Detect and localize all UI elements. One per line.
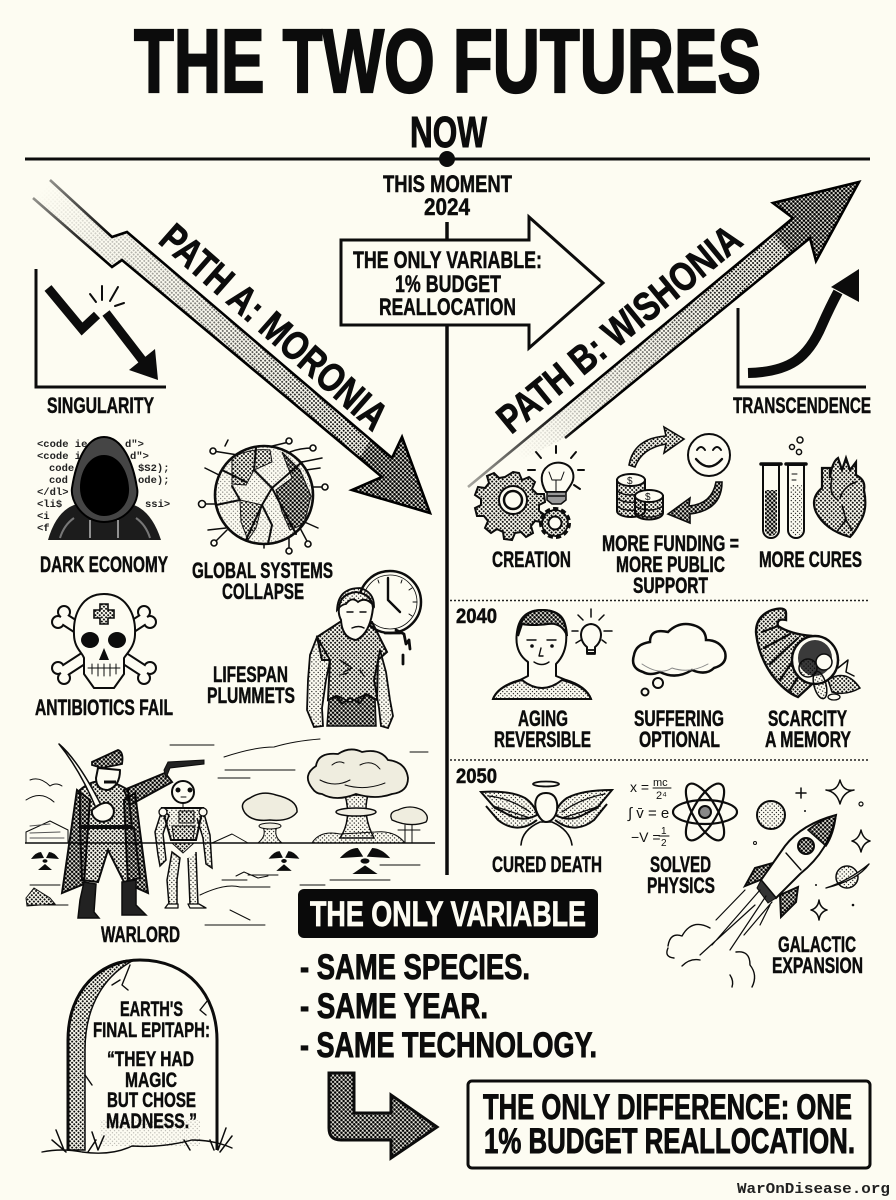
icon: hooded hacker with code: <i (37, 511, 50, 523)
icon: withering man and melting clock (307, 571, 421, 728)
chart: transcendence curve (738, 269, 866, 387)
tombstone: earth's final epitaph: EARTH'S (120, 998, 183, 1021)
label: lifespan plummets: PLUMMETS (207, 683, 295, 708)
icon: funding and public support cycle: $ (645, 492, 651, 503)
label: galactic expansion: GALACTIC (778, 932, 856, 957)
label: dark economy: DARK ECONOMY (40, 552, 168, 577)
icon: hooded hacker with code: ssi> (145, 499, 170, 511)
list: same species, year, technology: - SAME SPECIES. (300, 948, 530, 987)
label: antibiotics fail: ANTIBIOTICS FAIL (35, 695, 173, 720)
icon: equations and atom: −V = (631, 829, 661, 845)
arrow: path A descending (33, 180, 430, 513)
label: lifespan plummets: LIFESPAN (213, 662, 288, 687)
label: path B Wishonia: PATH B: WISHONIA (489, 217, 750, 442)
label: more funding more public support: MORE FUNDING = (602, 531, 739, 556)
divider and year: 2050: 2050 (456, 765, 497, 788)
label: scarcity a memory (765, 706, 851, 752)
icon: skull and crossbones (52, 594, 156, 688)
icon: funding and public support cycle: $ (627, 476, 633, 487)
callout arrow: the only variable (341, 217, 603, 348)
source credit: WarOnDisease.org (737, 1181, 890, 1198)
icon: hooded hacker with code: <code in (37, 451, 87, 463)
label: suffering optional: OPTIONAL (639, 727, 720, 752)
list: same species, year, technology (300, 948, 597, 1065)
heading: the only variable (298, 889, 598, 938)
icon: hooded hacker with code: d"> (130, 451, 149, 463)
callout arrow: the only variable: REALLOCATION (379, 294, 516, 321)
label: suffering optional (634, 706, 724, 752)
icon: equations and atom: 2 (661, 838, 667, 849)
label: creation: CREATION (492, 547, 571, 572)
now label: NOW (410, 108, 487, 157)
label: singularity: SINGULARITY (47, 393, 154, 418)
label: suffering optional: SUFFERING (634, 706, 724, 731)
icon: equations and atom: mc (653, 777, 668, 789)
mushroom clouds (242, 749, 427, 843)
heading: the only variable: THE ONLY VARIABLE (310, 895, 586, 934)
list: same species, year, technology: - SAME TECHNOLOGY. (300, 1026, 597, 1065)
callout arrow: the only variable: THE ONLY VARIABLE: (353, 247, 542, 274)
horizon and ground (25, 739, 435, 925)
label: aging reversible: REVERSIBLE (494, 727, 591, 752)
label: path A Moronia: PATH A: MORONIA (151, 216, 396, 439)
illustration: warlord and robot in nuclear wasteland (25, 739, 435, 925)
icon: hooded hacker with code: <f (37, 523, 50, 535)
central vertical divider (445, 222, 449, 875)
icon: test tubes and heart (761, 437, 865, 538)
arrow: path B ascending (468, 182, 859, 487)
icon: thought cloud (633, 624, 726, 696)
label: solved physics: PHYSICS (647, 873, 715, 898)
label: solved physics (647, 852, 715, 898)
label: cured death: CURED DEATH (492, 852, 602, 877)
icon: hooded hacker with code: <li$ (37, 499, 62, 511)
chart: singularity broken line (36, 269, 166, 387)
label: solved physics: SOLVED (650, 852, 711, 877)
tombstone: earth's final epitaph: MADNESS.” (106, 1110, 197, 1133)
icon: equations and atom (627, 777, 737, 849)
this moment 2024: THIS MOMENT (383, 171, 512, 198)
label: warlord: WARLORD (101, 922, 180, 947)
radiation symbols (31, 848, 390, 874)
panel: Moronia outcomes (25, 269, 435, 947)
label: aging reversible: AGING (518, 706, 568, 731)
label: lifespan plummets (207, 662, 295, 708)
icon: hooded hacker with code: d"> (125, 439, 144, 451)
callout: the only difference (468, 1081, 870, 1168)
icon: hooded hacker with code (37, 437, 170, 540)
robot figure (155, 781, 212, 908)
icon: equations and atom: 1 (661, 826, 667, 837)
callout arrow: the only variable: 1% BUDGET (395, 271, 501, 298)
tombstone: earth's final epitaph: “THEY HAD (107, 1048, 194, 1071)
label: more funding more public support: SUPPORT (633, 573, 708, 598)
label: more funding more public support (602, 531, 739, 598)
icon: hooded hacker with code: code (49, 463, 74, 475)
icon: equations and atom: ∫ v̄ = e (627, 805, 669, 822)
warlord figure (59, 744, 204, 918)
label: more funding more public support: MORE PUBLIC (616, 552, 725, 577)
icon: funding and public support cycle (617, 427, 730, 523)
arrow: bent to conclusion (329, 1073, 437, 1158)
this moment 2024 (383, 171, 512, 221)
label: global systems collapse: GLOBAL SYSTEMS (192, 558, 333, 583)
divider and year: 2040: 2040 (456, 605, 497, 628)
icon: equations and atom: 2⁴ (656, 790, 667, 802)
icon: fractured globe with nodes (198, 438, 328, 554)
tombstone: earth's final epitaph: FINAL EPITAPH: (93, 1019, 210, 1042)
icon: gears and lightbulb (475, 446, 584, 540)
icon: angel with halo (481, 782, 612, 845)
tombstone: earth's final epitaph (42, 960, 232, 1153)
icon: equations and atom: x = (630, 779, 649, 795)
icon: hooded hacker with code: $S2); (138, 463, 170, 475)
this moment 2024: 2024 (424, 194, 471, 221)
icon: hooded hacker with code: </dl> (37, 487, 69, 499)
icon: hooded hacker with code: ode); (138, 475, 170, 487)
panel: Wishonia outcomes (450, 269, 871, 987)
label: scarcity a memory: A MEMORY (765, 727, 851, 752)
timeline with now marker (25, 151, 870, 167)
label: global systems collapse (192, 558, 333, 604)
list: same species, year, technology: - SAME YEAR. (300, 987, 488, 1026)
tombstone: earth's final epitaph: BUT CHOSE (107, 1089, 196, 1112)
label: galactic expansion (772, 932, 863, 978)
tombstone: earth's final epitaph: MAGIC (125, 1069, 177, 1092)
icon: rocket in space (667, 780, 870, 987)
icon: young man with lightbulb (493, 609, 612, 699)
icon: cornucopia (756, 609, 860, 700)
label: aging reversible (494, 706, 591, 752)
icon: hooded hacker with code: <code ie (37, 439, 87, 451)
label: global systems collapse: COLLAPSE (222, 579, 304, 604)
icon: hooded hacker with code: cod (49, 475, 68, 487)
label: scarcity a memory: SCARCITY (768, 706, 847, 731)
